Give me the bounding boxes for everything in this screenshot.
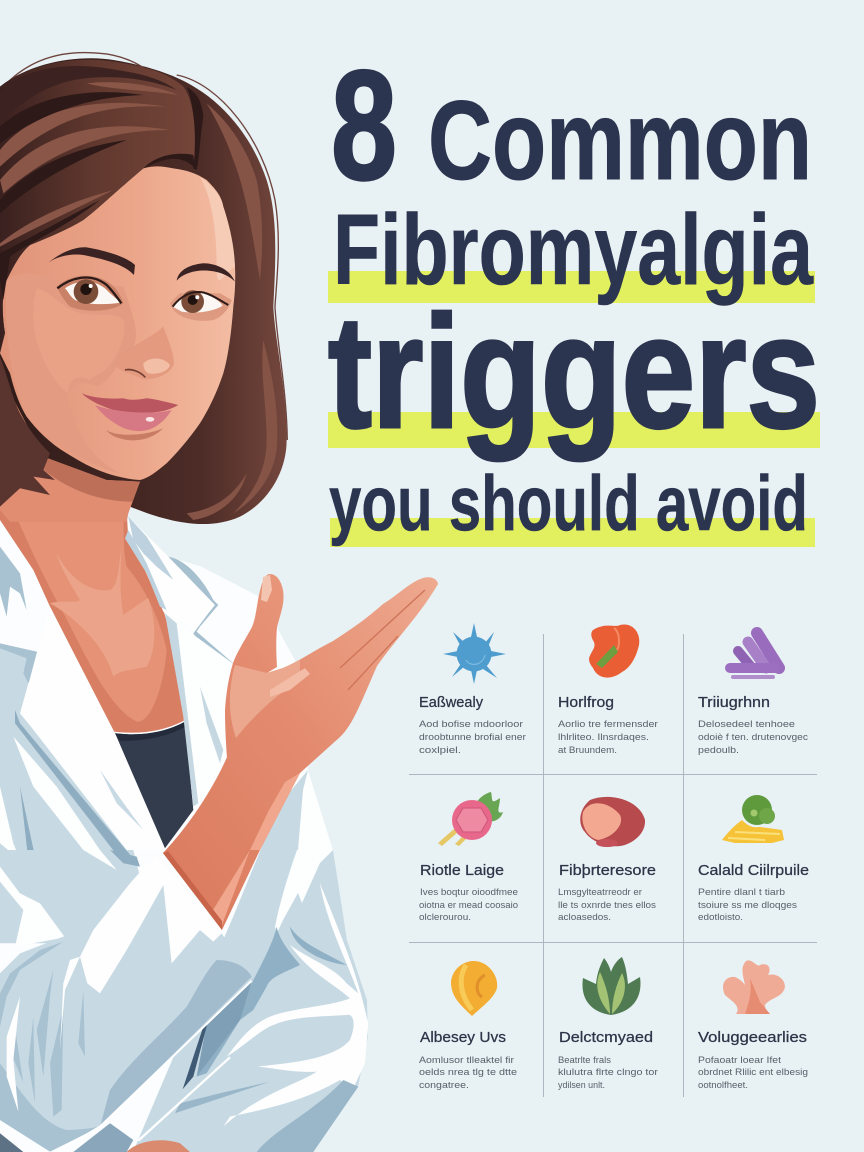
dark strip <box>183 1024 207 1089</box>
lips <box>82 393 178 431</box>
label: Albesey Uvs <box>420 1030 506 1046</box>
hair parting shadow <box>187 87 203 170</box>
description <box>419 719 527 756</box>
lapel fold marks <box>100 770 143 830</box>
hair top sweep <box>0 60 195 353</box>
card: Horlfrog <box>558 624 659 756</box>
description <box>698 887 797 923</box>
description: Pofaoatr loear Ifet <box>698 1055 781 1066</box>
description: acloasedos. <box>558 912 611 923</box>
trigger grid lines <box>409 634 817 1097</box>
icon: broccoli and yellow vegetables <box>722 795 784 843</box>
chin shadow <box>106 428 163 440</box>
neck and chest <box>0 510 185 733</box>
coat: upper torso and lapels <box>0 510 235 943</box>
highlight bar: triggers <box>328 412 820 448</box>
collar shading <box>0 547 40 683</box>
right eyebrow <box>177 263 235 282</box>
label: Triiugrhnn <box>698 695 770 711</box>
description: Aorlio tre fermensder <box>558 719 659 730</box>
lower dark centre <box>73 1123 133 1152</box>
neck top <box>0 373 140 522</box>
icon: blue sun <box>443 623 506 684</box>
collar edge light blue <box>125 517 173 610</box>
description: Aod bofise mdoorloor <box>419 719 524 730</box>
white seam <box>138 1057 230 1141</box>
coat: white outer edge upper <box>275 770 333 933</box>
description: lle ts oxnrde tnes ellos <box>558 900 656 911</box>
chest highlight <box>50 547 154 677</box>
under-chin shadow <box>13 407 140 502</box>
torso base <box>0 643 157 943</box>
description: ootnolfheet. <box>698 1080 748 1091</box>
description: edotloisto. <box>698 912 743 923</box>
highlight bar: you should avoid <box>330 518 815 547</box>
sleeve white cuff <box>80 853 222 993</box>
hair light streaks <box>0 82 178 247</box>
sleeve left whites <box>7 957 80 1112</box>
hair right streaks <box>187 103 277 520</box>
torso white folds <box>0 737 117 870</box>
description: pedoulb. <box>698 745 739 756</box>
right collar <box>128 517 218 632</box>
right lapel <box>173 620 235 803</box>
lower dark left <box>0 1133 23 1152</box>
description: congatree. <box>419 1080 469 1091</box>
icon: yellow shield <box>451 961 497 1016</box>
right lapel fold marks <box>200 687 223 763</box>
bottom fold <box>175 1082 270 1113</box>
description: lhlrliteo. Ilnsrdaqes. <box>558 732 649 743</box>
eye bag right <box>170 293 232 321</box>
icon: meat <box>580 797 645 847</box>
description <box>558 887 656 923</box>
thumb nail <box>261 575 272 602</box>
hand highlight <box>270 668 310 697</box>
head <box>0 60 277 522</box>
hair dark streaks <box>0 92 195 300</box>
card: Delctcmyaed <box>558 957 659 1091</box>
cuff edge shadow <box>163 851 222 930</box>
description <box>558 719 659 756</box>
description: Beatrlte frals <box>558 1055 611 1066</box>
nose highlight <box>143 358 170 374</box>
left lapel <box>21 607 165 850</box>
description <box>698 719 808 756</box>
description: olclerourou. <box>419 912 471 923</box>
finger creases <box>340 590 425 690</box>
description <box>558 1055 659 1091</box>
illustration: woman in white coat <box>0 53 438 1152</box>
fold blue right <box>290 927 347 965</box>
description: ydilsen unlt. <box>558 1080 605 1091</box>
card: Triiugrhnn <box>698 633 808 756</box>
dark top <box>115 722 193 848</box>
label: Eaßwealy <box>419 695 484 711</box>
left eye socket <box>57 276 123 311</box>
description <box>419 1055 517 1091</box>
heading: 8: 8 <box>331 39 397 213</box>
hair lower-left strands <box>0 357 55 507</box>
card: Albesey Uvs <box>419 961 517 1091</box>
darker lower right <box>257 1080 358 1152</box>
white diagonal band <box>0 867 65 947</box>
icon: raspberry <box>438 792 503 846</box>
label: Horlfrog <box>558 695 614 711</box>
label: Fibþrteresore <box>559 863 656 879</box>
gap fold <box>197 977 253 1077</box>
description: klulutra flrte clngo tor <box>558 1067 659 1078</box>
label: Riotle Laige <box>420 863 504 879</box>
description: obrdnet Rlilic ent elbesig <box>698 1067 808 1078</box>
card: Calald Ciilrpuile <box>698 795 809 923</box>
arm and hand <box>163 574 438 930</box>
icon: purple capsules <box>730 633 779 677</box>
description: oelds nrea tlg te dtte <box>419 1067 517 1078</box>
dark top neckline <box>115 722 186 741</box>
description: oiotna er mead coosaio <box>419 900 518 911</box>
label: Calald Ciilrpuile <box>698 863 809 879</box>
icon: coral <box>723 960 785 1014</box>
hair back <box>0 58 287 524</box>
card: Fibþrteresore <box>558 797 656 923</box>
right eye <box>173 290 228 313</box>
right lapel blue edge <box>165 613 198 807</box>
description: tsoiure ss me dloqges <box>698 900 797 911</box>
sleeve lower shade <box>0 1063 100 1152</box>
title <box>328 39 820 547</box>
sleeve edge <box>57 981 252 1152</box>
description: odoiè f ten. drutenovgec <box>698 732 808 743</box>
card: Eaßwealy <box>419 623 527 756</box>
mid-face shade <box>6 274 136 473</box>
description: at Bruundem. <box>558 745 617 756</box>
palm highlight <box>230 660 300 738</box>
left collar <box>0 520 50 652</box>
cheek light <box>33 288 124 393</box>
hair flyaway strand <box>7 53 287 440</box>
sleeve <box>0 850 255 1152</box>
upper torso fold band <box>0 850 63 943</box>
description: Pentire dlanl t tiarb <box>698 887 785 898</box>
fold blue <box>197 927 300 1077</box>
description <box>419 887 518 923</box>
coat: base and shoulders <box>0 518 368 1152</box>
highlight bar: Fibromyalgia <box>328 271 815 303</box>
white outer band <box>223 883 368 1127</box>
sleeve dark panel <box>100 960 252 1127</box>
forehead light <box>200 177 235 280</box>
nose <box>115 327 174 379</box>
sleeve left folds <box>0 942 85 1117</box>
description: Aomlusor tlleaktel fir <box>419 1055 515 1066</box>
card: Voluggeearlies <box>698 960 808 1091</box>
label: Delctcmyaed <box>559 1030 653 1046</box>
label: Voluggeearlies <box>698 1030 807 1046</box>
description: coxlpiel. <box>419 745 461 756</box>
hair dark top band <box>0 66 177 123</box>
description: Delosedeel tenhoee <box>698 719 795 730</box>
lower coat details <box>0 883 368 1152</box>
icon: green leaves <box>582 957 640 1015</box>
left eyebrow <box>48 247 135 275</box>
forearm light edge <box>213 773 300 925</box>
icon: red pepper <box>589 624 639 678</box>
card: Riotle Laige <box>419 792 518 923</box>
face <box>0 166 235 480</box>
sleeve base <box>0 853 255 1152</box>
chest light area <box>13 510 167 722</box>
lower hand <box>127 1140 190 1152</box>
collar outline shadow <box>168 557 235 665</box>
description: droobtunne brofial ener <box>419 732 527 743</box>
coat: right side panel <box>133 770 368 1152</box>
description <box>698 1055 808 1091</box>
description: Lmsgylteatrreodr er <box>558 887 643 898</box>
left eye <box>57 278 121 304</box>
nostril <box>125 370 145 377</box>
description: Ives boqtur oioodfmee <box>420 887 518 898</box>
torso blue folds <box>15 710 140 880</box>
